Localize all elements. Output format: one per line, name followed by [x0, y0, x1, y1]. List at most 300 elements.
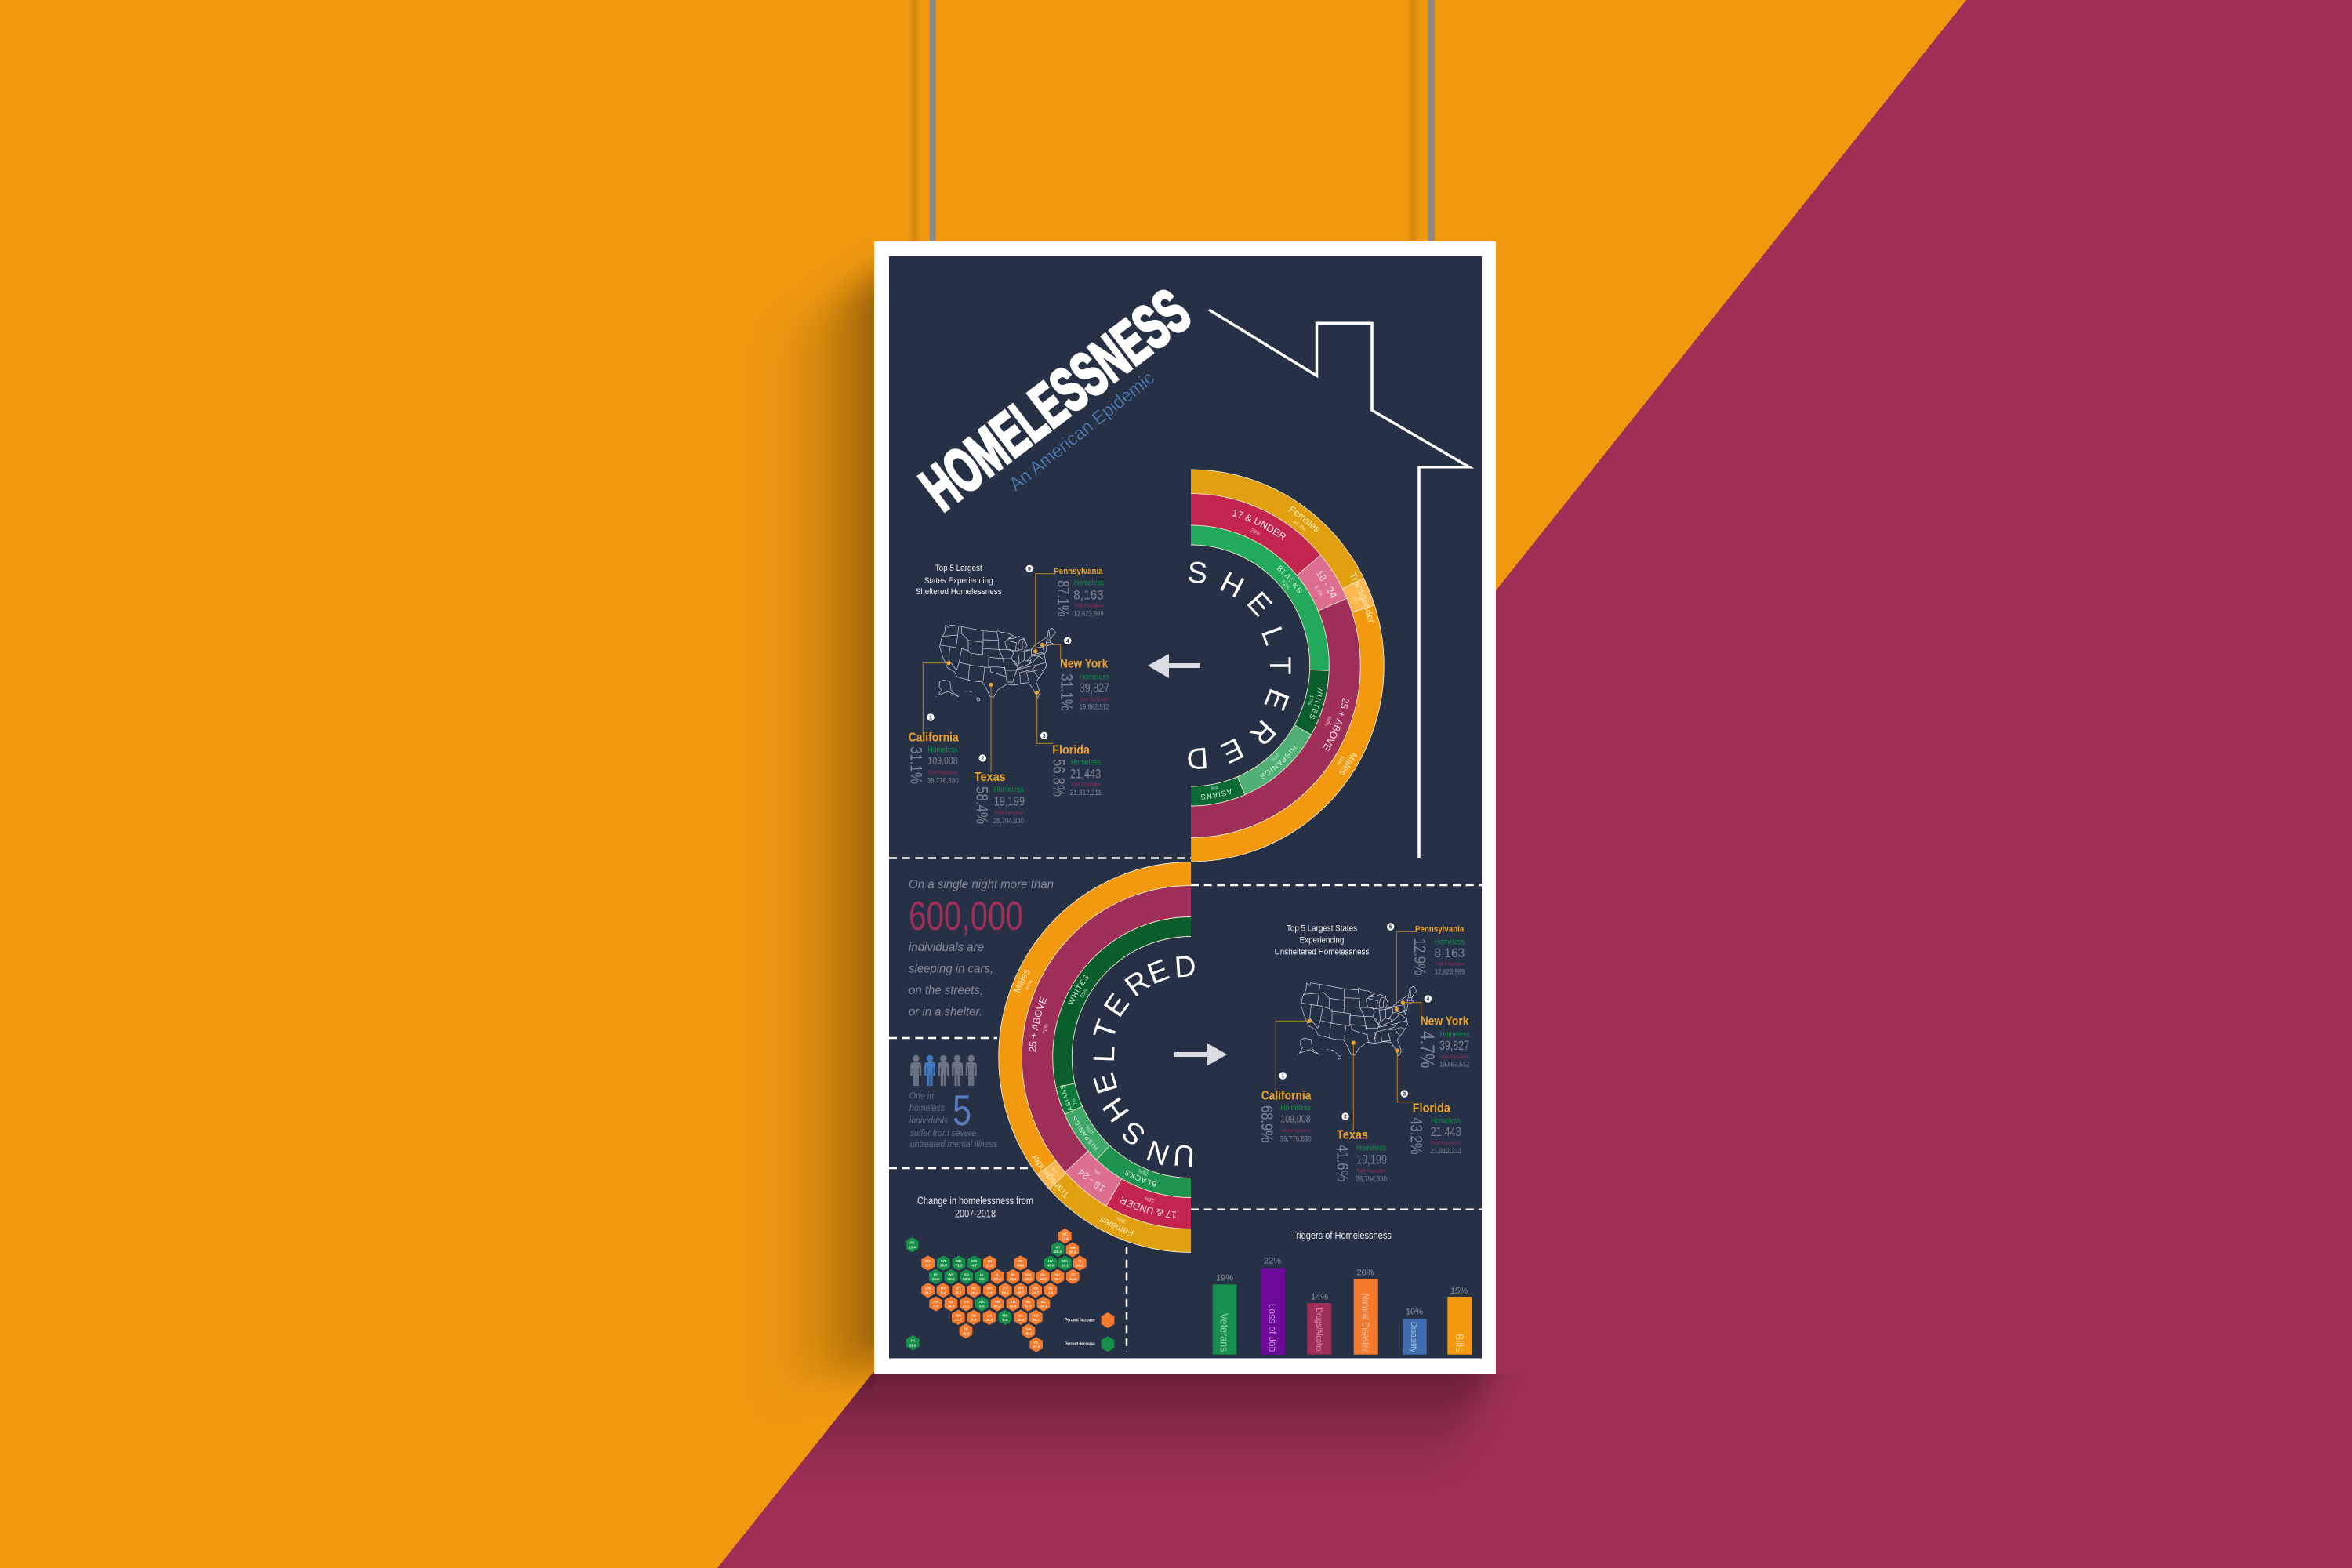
- hex tile map of states: 9.4: [941, 1290, 946, 1294]
- heading: UNSHELTERED curved letters: E: [1087, 1069, 1125, 1098]
- hex tile map of states: 5.4: [987, 1290, 993, 1294]
- hex tile map of states: 45.7: [1017, 1290, 1025, 1294]
- callout: Texas: Homeless: [994, 786, 1024, 794]
- chart: unsheltered semicircle rings: BLACKS: [1124, 1170, 1157, 1187]
- callout: Florida: [1035, 691, 1102, 797]
- subtitle: An American Epidemic: [1005, 368, 1159, 495]
- chart: unsheltered semicircle rings: 70%: [1043, 1024, 1047, 1033]
- hex tile map of states: IL: [996, 1272, 1000, 1276]
- callout: Texas: 58.4%: [972, 786, 991, 824]
- chart: sheltered semicircle rings: 8.4%: [1315, 585, 1323, 596]
- hex tile map of states: 29.7: [924, 1290, 932, 1294]
- chart: sheltered semicircle rings: ASIANS: [1201, 789, 1231, 800]
- hex tile map of states: 3.7: [925, 1264, 931, 1268]
- text block: 600,000 statistic: individuals are: [909, 941, 984, 954]
- hex tile map of states: ID: [934, 1272, 938, 1276]
- hex tile map of states: [906, 1229, 1087, 1352]
- icon: five people, one highlighted: [910, 1055, 977, 1086]
- callout: Pennsylvania: Homeless: [1074, 579, 1104, 588]
- chart: unsheltered semicircle rings: 55%: [1080, 988, 1088, 998]
- hex tile map of states: TX: [964, 1327, 969, 1331]
- hex tile map of states: 21.1: [963, 1305, 970, 1308]
- chart: sheltered semicircle rings: HISPANICS: [1261, 745, 1297, 779]
- heading: UNSHELTERED curved letters: H: [1097, 1091, 1136, 1127]
- callout: California: Total Population: [1280, 1128, 1311, 1134]
- bar: Bills: 15%: [1450, 1287, 1468, 1296]
- text block: 600,000 statistic: on the streets,: [909, 984, 983, 997]
- hex tile map of states: OH: [1025, 1272, 1031, 1276]
- bar: Bills: [1447, 1287, 1472, 1355]
- chart: unsheltered semicircle rings: 23%: [1138, 1169, 1149, 1176]
- hex tile map of states: NC: [1041, 1300, 1047, 1304]
- heading: SHELTERED curved letters: T: [1263, 656, 1296, 675]
- hex tile map of states: 64.0: [1017, 1264, 1025, 1268]
- arrow: left: [1148, 654, 1200, 678]
- chart: sheltered semicircle rings: 8%: [1210, 786, 1218, 790]
- heading: UNSHELTERED curved letters: L: [1088, 1045, 1121, 1063]
- bar: Loss of Job: Loss of Job: [1267, 1304, 1279, 1352]
- callout: California: [1258, 1019, 1312, 1143]
- hex tile map of states: WY: [948, 1272, 955, 1276]
- hex tile map of states: 16.5: [932, 1277, 939, 1281]
- callout: New York: New York: [1421, 1015, 1469, 1029]
- bar chart: [1213, 1257, 1472, 1355]
- hex tile map of states: CT: [1070, 1272, 1076, 1276]
- hex tile map of states: 36.1: [1009, 1277, 1017, 1281]
- callout: Texas: Total Population: [1356, 1168, 1387, 1174]
- hex tile map of states: 6.9: [1003, 1318, 1008, 1322]
- callout: New York: [1401, 995, 1469, 1069]
- hex tile map of states: NE: [971, 1287, 977, 1290]
- heading: SHELTERED curved letters: L: [1254, 622, 1291, 649]
- callout: Texas: [972, 683, 1025, 826]
- callout: New York: Total Population: [1080, 697, 1109, 702]
- hex tile map of states: 37.7: [1025, 1305, 1032, 1308]
- heading: UNSHELTERED curved letters: U: [1172, 1138, 1196, 1172]
- hex tile map of states: 25.8: [1009, 1305, 1017, 1308]
- hex tile map of states: 13.4: [909, 1245, 916, 1249]
- hex tile map of states: 33.0: [1033, 1345, 1040, 1349]
- heading: SHELTERED curved letters: D: [1185, 741, 1209, 775]
- hex tile map of states: VT: [1055, 1245, 1060, 1249]
- poster shadow: [745, 274, 1490, 1494]
- text block: 600,000 statistic: 600,000: [909, 894, 1023, 939]
- heading: SHELTERED curved letters: S: [1186, 556, 1208, 590]
- text block: 600,000 statistic: or in a shelter.: [909, 1006, 982, 1019]
- hex tile map of states: WA: [925, 1259, 931, 1263]
- hex tile map of states: UT: [956, 1287, 961, 1290]
- map: US states, sheltered: [935, 625, 1056, 701]
- hex tile map of states: CO: [964, 1300, 969, 1304]
- hex tile map of states: NJ: [1055, 1272, 1060, 1276]
- callout: Pennsylvania: [1025, 565, 1104, 653]
- callout: Florida: 43.2%: [1406, 1117, 1425, 1155]
- hex tile map of states: 5.3: [956, 1290, 961, 1294]
- chart: unsheltered semicircle rings: 25 + ABOVE: [1029, 996, 1047, 1052]
- heading: UNSHELTERED curved letters: S: [1116, 1114, 1152, 1152]
- heading: unsheltered top 5: Unsheltered Homelessness: [1275, 947, 1370, 956]
- hex tile map of states: 18.9: [909, 1343, 916, 1347]
- text block: one in five: individuals: [909, 1115, 948, 1126]
- callout: New York: New York: [1060, 658, 1109, 671]
- callout: Texas: 19,199: [994, 793, 1025, 808]
- hex tile map of states: MI: [1018, 1259, 1022, 1263]
- hex tile map of states: 16.1: [1062, 1264, 1069, 1268]
- hex tile map of states: 24.7: [1032, 1290, 1040, 1294]
- chart: unsheltered semicircle rings: Females: [1099, 1217, 1134, 1237]
- hex tile map of states: OR: [925, 1287, 931, 1290]
- heading: SHELTERED curved letters: R: [1243, 713, 1282, 752]
- callout: Texas: Texas: [1337, 1129, 1368, 1142]
- text block: one in five: suffer from severe: [910, 1127, 976, 1138]
- callout: Pennsylvania: Total Population: [1074, 604, 1104, 609]
- callout: Pennsylvania: 12,623,989: [1073, 610, 1104, 619]
- hex tile map of states: 29.2: [971, 1290, 978, 1294]
- hex tile map of states: HI: [911, 1339, 915, 1343]
- heading: UNSHELTERED curved letters: T: [1087, 1016, 1125, 1044]
- house outline: [1209, 310, 1469, 858]
- bar: Disability: 10%: [1406, 1308, 1423, 1317]
- callout: New York: 39,827: [1439, 1038, 1469, 1053]
- hex tile map of states: 4.3: [1048, 1290, 1054, 1294]
- callout: California: 68.9%: [1258, 1105, 1276, 1142]
- callout: Florida: 21,443: [1070, 766, 1101, 781]
- hex tile map of states: SC: [1033, 1313, 1039, 1317]
- hex tile map of states: 18.4: [1054, 1250, 1062, 1254]
- callout: New York: 4: [1426, 997, 1429, 1002]
- chart: unsheltered semicircle rings: 35%: [1116, 1217, 1126, 1224]
- chart: sheltered semicircle rings: Females: [1289, 506, 1319, 532]
- chart: unsheltered semicircle rings: Transgender: [1032, 1155, 1068, 1199]
- heading: SHELTERED curved letters: E: [1258, 684, 1295, 715]
- hex tile map of states: 30.0: [1033, 1318, 1040, 1322]
- hex tile map of states: OK: [971, 1313, 977, 1317]
- callout: California: Homeless: [927, 746, 958, 754]
- panel: sheltered states: [906, 564, 1109, 826]
- text block: 600,000 statistic: sleeping in cars,: [909, 963, 993, 976]
- heading: SHELTERED curved letters: [1185, 556, 1296, 775]
- title: HOMELESSNESS: [908, 276, 1203, 524]
- chart: sheltered semicircle rings: 3%: [1352, 596, 1358, 603]
- panel: triggers of homelessness: [1213, 1229, 1472, 1355]
- text block: one in five: [909, 1086, 997, 1149]
- hex tile map of states: 30.4: [1017, 1318, 1025, 1322]
- bar: Disability: [1403, 1308, 1427, 1355]
- hex tile map of states: 8.3: [979, 1305, 985, 1308]
- bar: Natural Disaster: 20%: [1357, 1269, 1374, 1278]
- chart: unsheltered semicircle rings: 21%: [1145, 1196, 1155, 1203]
- callout: California: 31.1%: [906, 746, 925, 784]
- chart: unsheltered semicircle rings: 15%: [1085, 1126, 1094, 1134]
- heading: UNSHELTERED curved letters: D: [1174, 950, 1197, 985]
- heading: UNSHELTERED curved letters: N: [1143, 1133, 1174, 1171]
- poster frame: [874, 241, 1496, 1374]
- hex tile map of states: WV: [1018, 1287, 1024, 1290]
- heading: unsheltered top 5: Top 5 Largest States: [1287, 924, 1357, 934]
- arrow: right: [1174, 1043, 1227, 1066]
- hex tile map of states: AZ: [949, 1300, 953, 1304]
- hanging strings: [911, 0, 1435, 241]
- bar: Veterans: Veterans: [1217, 1313, 1231, 1352]
- heading: UNSHELTERED curved letters: [1087, 950, 1197, 1172]
- heading: UNSHELTERED curved letters: R: [1120, 964, 1156, 1004]
- hex tile map of states: DE: [1048, 1287, 1053, 1290]
- callout: Florida: Homeless: [1071, 759, 1101, 768]
- text block: 600,000 statistic: [909, 878, 1054, 1019]
- callout: Texas: 2: [981, 756, 984, 762]
- callout: Texas: [1334, 1040, 1387, 1184]
- hex tile map of states: 18.0: [1076, 1264, 1083, 1268]
- hex tile map of states: ME: [1062, 1232, 1068, 1236]
- callout: California: California: [1261, 1090, 1312, 1103]
- text block: one in five: homeless: [909, 1102, 945, 1113]
- chart: sheltered semicircle rings: 17 & UNDER: [1232, 510, 1286, 541]
- heading: SHELTERED curved letters: E: [1216, 731, 1248, 769]
- chart: sheltered semicircle rings: 52%: [1281, 580, 1290, 590]
- callout: Florida: 3: [1403, 1091, 1406, 1098]
- chart: unsheltered semicircle rings: [998, 862, 1192, 1253]
- chart: unsheltered semicircle rings: 9%: [1094, 1169, 1101, 1176]
- hex tile map of states: 20.3: [994, 1277, 1001, 1281]
- heading: UNSHELTERED curved letters: E: [1098, 988, 1136, 1023]
- callout: New York: 19,862,512: [1080, 702, 1109, 711]
- panel: change in homelessness hex map: [906, 1194, 1114, 1352]
- callout: Pennsylvania: Pennsylvania: [1415, 925, 1465, 935]
- hex tile map of states: 46.8: [962, 1331, 970, 1335]
- hex tile map of states: KS: [979, 1300, 985, 1304]
- callout: Texas: 28,704,330: [1356, 1175, 1387, 1184]
- legend: percent increase and decrease: Percent increase: [1065, 1319, 1095, 1323]
- chart: unsheltered semicircle rings: 7%: [1071, 1098, 1077, 1105]
- hex tile map of states: IN: [1011, 1272, 1015, 1276]
- callout: Texas: 19,199: [1356, 1152, 1387, 1167]
- callout: California: 39,776,830: [1280, 1134, 1312, 1143]
- hex tile map of states: 4.7: [971, 1264, 977, 1268]
- hex tile map of states: 62.6: [947, 1277, 955, 1281]
- heading: SHELTERED curved letters: H: [1214, 566, 1249, 604]
- section dividers: [889, 858, 1482, 1352]
- heading: unsheltered top 5: Experiencing: [1300, 936, 1344, 946]
- callout: Florida: Florida: [1052, 744, 1090, 757]
- heading: hex map: Change in homelessness from: [917, 1194, 1033, 1207]
- heading: unsheltered top 5: [1275, 924, 1370, 956]
- callout: Florida: 21,312,211: [1430, 1147, 1461, 1156]
- callout: Florida: Homeless: [1431, 1117, 1461, 1126]
- hex tile map of states: 24.4: [1069, 1277, 1076, 1281]
- heading: hex map: 2007-2018: [955, 1207, 996, 1220]
- hex tile map of states: AR: [995, 1300, 1000, 1304]
- callout: Florida: 3: [1043, 734, 1046, 739]
- callout: Texas: Total Population: [994, 810, 1024, 815]
- hex tile map of states: LA: [987, 1313, 993, 1317]
- callout: New York: [1040, 637, 1109, 711]
- hex tile map of states: WI: [987, 1259, 992, 1263]
- hex tile map of states: MO: [987, 1287, 993, 1290]
- hex tile map of states: 58.9: [947, 1305, 955, 1308]
- hex tile map of states: 24.1: [1040, 1305, 1047, 1308]
- hex tile map of states: NY: [1048, 1259, 1054, 1263]
- callout: New York: 4: [1066, 639, 1069, 644]
- callout: Pennsylvania: 8,163: [1434, 946, 1465, 960]
- hex tile map of states: AL: [1018, 1313, 1023, 1317]
- callout: California: Homeless: [1280, 1104, 1311, 1112]
- hex tile map of states: 71.2: [955, 1264, 963, 1268]
- hex tile map of states: NM: [956, 1313, 961, 1317]
- hex tile map of states: VA: [1025, 1300, 1031, 1304]
- callout: New York: 4.7%: [1416, 1031, 1438, 1068]
- bar: Drugs/Alcohol: 14%: [1311, 1292, 1328, 1301]
- chart: unsheltered semicircle rings: WHITES: [1068, 975, 1088, 1004]
- hex tile map of states: 58.7: [1054, 1277, 1062, 1281]
- heading: sheltered top 5: Sheltered Homelessness: [916, 587, 1002, 597]
- callout: New York: 39,827: [1080, 681, 1109, 695]
- map: US states, unsheltered: [1297, 983, 1417, 1059]
- callout: New York: Homeless: [1440, 1031, 1469, 1040]
- callout: Florida: 21,443: [1431, 1124, 1461, 1139]
- callout: California: 39,776,830: [927, 776, 959, 785]
- callout: Pennsylvania: 5: [1028, 567, 1031, 572]
- callout: Florida: [1396, 1048, 1461, 1156]
- bar: Disability: Disability: [1409, 1322, 1418, 1352]
- bar: Natural Disaster: Natural Disaster: [1359, 1294, 1372, 1352]
- hex tile map of states: 63.9: [963, 1277, 971, 1281]
- callout: New York: Homeless: [1080, 673, 1109, 682]
- text block: one in five: untreated mental illness: [910, 1138, 997, 1149]
- hex tile map of states: 35.2: [1069, 1250, 1076, 1254]
- callout: New York: Total Population: [1439, 1054, 1469, 1060]
- callout: Pennsylvania: [1387, 923, 1465, 1011]
- hex tile map of states: CA: [933, 1300, 939, 1304]
- bar: Bills: Bills: [1454, 1334, 1466, 1352]
- bar: Veterans: 19%: [1216, 1273, 1233, 1283]
- chart: sheltered semicircle rings: 24%: [1271, 753, 1279, 762]
- hex tile map of states: 39.8: [985, 1318, 993, 1322]
- hex tile map of states: 35.2: [993, 1305, 1001, 1308]
- hex tile map of states: AK: [909, 1241, 915, 1245]
- hex tile map of states: ND: [956, 1259, 962, 1263]
- hex tile map of states: 17.7: [955, 1318, 962, 1322]
- hex tile map of states: MA: [1062, 1259, 1069, 1263]
- chart: sheltered semicircle rings: [1190, 469, 1385, 862]
- heading: sheltered top 5: Top 5 Largest: [935, 564, 982, 573]
- callout: Pennsylvania: 12,623,989: [1435, 968, 1465, 977]
- chart: sheltered semicircle rings: 25 + ABOVE: [1322, 698, 1349, 751]
- heading: triggers: Triggers of Homelessness: [1291, 1229, 1392, 1241]
- callout: New York: 19,862,512: [1439, 1061, 1469, 1069]
- callout: Pennsylvania: 5: [1389, 925, 1392, 930]
- bar: Loss of Job: 22%: [1264, 1257, 1281, 1266]
- chart: sheltered semicircle rings: Transgender: [1350, 572, 1374, 622]
- bar: Loss of Job: [1261, 1257, 1285, 1355]
- chart: sheltered semicircle rings: 28%: [1250, 528, 1260, 535]
- hex tile map of states: MD: [1033, 1287, 1039, 1290]
- hex tile map of states: MN: [971, 1259, 978, 1263]
- hex tile map of states: NH: [1070, 1246, 1076, 1250]
- hex tile map of states: 12.8: [1040, 1277, 1047, 1281]
- callout: Texas: 2: [1344, 1115, 1347, 1120]
- callout: Pennsylvania: Total Population: [1435, 962, 1465, 967]
- hex tile map of states: FL: [1034, 1341, 1039, 1345]
- callout: California: Total Population: [927, 770, 959, 775]
- callout: California: 109,008: [927, 754, 958, 766]
- heading: hex map: [917, 1194, 1033, 1220]
- callout: Florida: Total Population: [1431, 1140, 1461, 1145]
- hex tile map of states: 48.2: [1025, 1331, 1033, 1335]
- callout: Texas: 41.6%: [1334, 1145, 1352, 1181]
- chart: sheltered semicircle rings: 69%: [1325, 717, 1331, 726]
- hex tile map of states: 11.8: [986, 1264, 993, 1268]
- hex tile map of states: 33.0: [940, 1264, 947, 1268]
- callout: Pennsylvania: 87.1%: [1054, 580, 1072, 617]
- callout: California: [906, 661, 959, 785]
- chart: sheltered semicircle rings: 55%: [1337, 756, 1345, 765]
- callout: Pennsylvania: Pennsylvania: [1054, 567, 1103, 576]
- hex tile map of states: TN: [1011, 1300, 1016, 1304]
- hex tile map of states: KY: [1003, 1287, 1008, 1290]
- callout: Florida: Total Population: [1071, 782, 1102, 788]
- hex tile map of states: 0.5: [971, 1318, 977, 1322]
- heading: SHELTERED curved letters: E: [1240, 586, 1278, 622]
- callout: California: 109,008: [1280, 1113, 1311, 1125]
- hex tile map of states: SD: [964, 1272, 970, 1276]
- callout: Pennsylvania: Homeless: [1435, 938, 1465, 946]
- chart: unsheltered semicircle rings: 1%: [1051, 1167, 1058, 1174]
- chart: unsheltered semicircle rings: Males: [1014, 969, 1029, 993]
- bar: Natural Disaster: [1354, 1269, 1378, 1355]
- chart: sheltered semicircle rings: BLACKS: [1276, 565, 1301, 593]
- chart: sheltered semicircle rings: WHITES: [1309, 687, 1323, 719]
- callout: Florida: 21,312,211: [1070, 789, 1102, 797]
- callout: California: 1: [1281, 1074, 1284, 1079]
- panel: unsheltered states: [1258, 923, 1469, 1184]
- callout: California: California: [909, 731, 959, 745]
- hex tile map of states: RI: [1078, 1259, 1082, 1263]
- chart: unsheltered semicircle rings: ASIANS: [1060, 1085, 1073, 1110]
- chart: sheltered semicircle rings: 44.7%: [1294, 521, 1306, 532]
- heading: UNSHELTERED curved letters: E: [1143, 953, 1174, 991]
- hex tile map of states: MS: [1003, 1313, 1007, 1317]
- chart: unsheltered semicircle rings: 17 & UNDER: [1120, 1196, 1176, 1218]
- hex tile map of states: 6.8: [979, 1277, 985, 1281]
- callout: Florida: 56.8%: [1049, 759, 1068, 797]
- hex tile map of states: GA: [1026, 1327, 1032, 1331]
- chart: unsheltered semicircle rings: 64%: [1025, 980, 1033, 989]
- legend: percent increase and decrease: [1065, 1312, 1114, 1352]
- callout: New York: 31.1%: [1057, 673, 1076, 711]
- callout: California: 1: [929, 715, 932, 721]
- callout: Texas: 28,704,330: [993, 817, 1024, 826]
- hex tile map of states: 43.0: [1047, 1264, 1054, 1268]
- hex tile map of states: IA: [980, 1272, 984, 1276]
- heading: sheltered top 5: [916, 564, 1002, 597]
- heading: sheltered top 5: States Experiencing: [924, 576, 993, 586]
- hex tile map of states: PA: [1040, 1272, 1046, 1276]
- legend: percent increase and decrease: Percent decrease: [1065, 1342, 1095, 1347]
- hex tile map of states: 59.1: [1002, 1290, 1009, 1294]
- callout: Florida: Florida: [1413, 1102, 1450, 1115]
- bar: Drugs/Alcohol: Drugs/Alcohol: [1314, 1308, 1323, 1352]
- text block: 600,000 statistic: On a single night more than: [909, 878, 1054, 891]
- bar: Veterans: [1213, 1273, 1236, 1355]
- text block: one in five: 5: [953, 1086, 971, 1134]
- chart: sheltered semicircle rings: 18 - 24: [1316, 571, 1337, 598]
- callout: Pennsylvania: 12.9%: [1410, 938, 1428, 975]
- chart: unsheltered semicircle rings: 18 - 24: [1078, 1168, 1105, 1192]
- chart: sheltered semicircle rings: Males: [1339, 753, 1358, 775]
- bar: Drugs/Alcohol: [1307, 1292, 1331, 1355]
- text block: one in five: One in: [909, 1091, 934, 1102]
- hex tile map of states: 13.6: [1062, 1236, 1069, 1240]
